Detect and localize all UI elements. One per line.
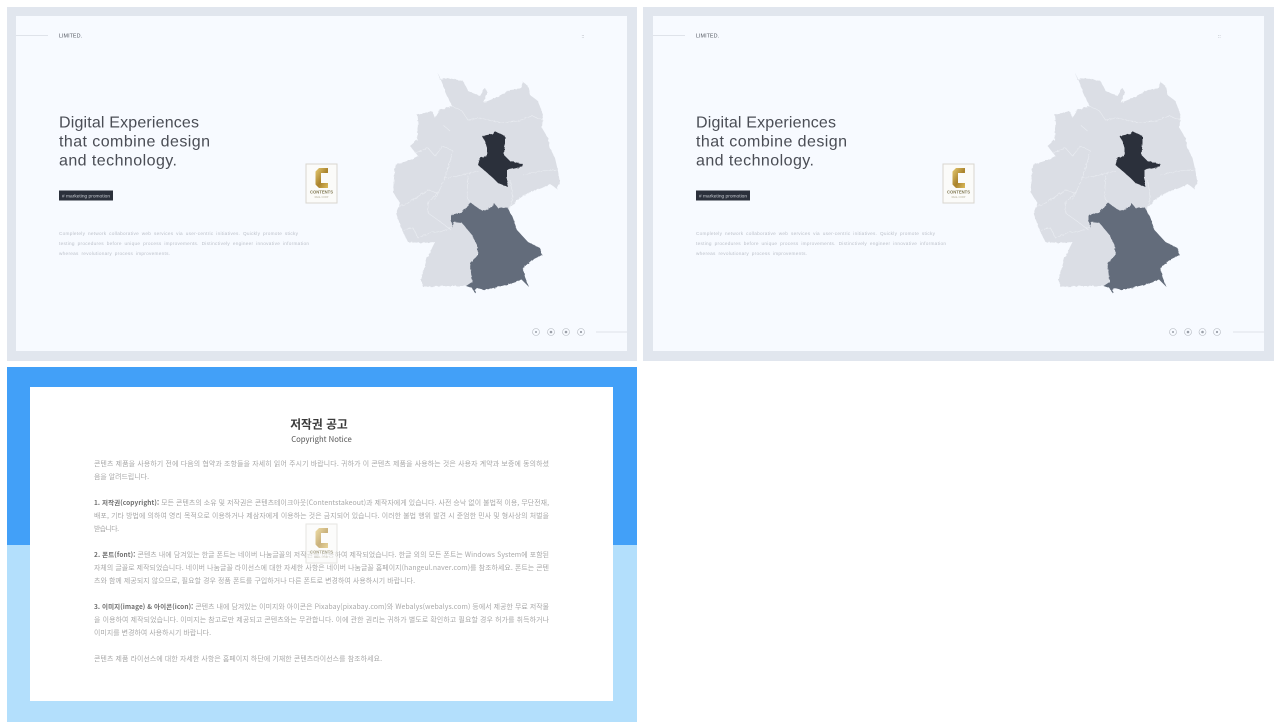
panel: slide 2 [643, 7, 1274, 361]
region: Bavaria [451, 203, 542, 293]
description: testing procedures before unique process improvements. Distinctively engineer innovative information [696, 241, 946, 246]
notice body: 받습니다. [94, 523, 119, 533]
region: Bavaria [1088, 203, 1180, 293]
notice body: 배포, 기타 방법에 의하여 영리 목적으로 이용하거나 제삼자에게 이용하는 것은 금지되어 있습니다. 이러한 불법 행위 발견 시 준엄한 민사 및 형사상의 처벌을 [94, 510, 549, 520]
logo [306, 164, 337, 203]
notice body: 이미지를 변경하여 사용하시기 바랍니다. [94, 627, 211, 637]
notice subtitle: Copyright Notice [291, 434, 352, 445]
heading: and technology. [59, 152, 177, 170]
notice body: 콘텐츠 제품 라이선스에 대한 자세한 사항은 홈페이지 하단에 기재한 콘텐츠라이선스를 참조하세요. [94, 653, 382, 663]
region: Saxony-Anhalt [1116, 131, 1160, 187]
panel: copyright notice [7, 367, 637, 722]
map: Germany [1030, 73, 1198, 293]
notice body: 을 이용하여 제작되었습니다. 이미지는 참고로만 제공되고 콘텐츠와는 무관합니다. 이에 관한 권리는 귀하가 별도로 확인하고 필요할 경우 허가를 취득하거나 [94, 614, 550, 624]
heading: Digital Experiences [696, 114, 836, 132]
tag [696, 190, 750, 200]
region: Germany base [393, 73, 560, 287]
tag: # marketing promotion [699, 194, 747, 200]
heading: that combine design [59, 134, 210, 150]
map: Germany [393, 73, 560, 293]
logo: CONTENTS [947, 190, 970, 194]
description: Completely network collaborative web services via user-centric initiatives. Quickly promote sticky [59, 231, 299, 236]
description: Completely network collaborative web services via user-centric initiatives. Quickly promote sticky [696, 231, 936, 236]
heading: that combine design [696, 134, 847, 150]
description: testing procedures before unique process improvements. Distinctively engineer innovative information [59, 241, 309, 246]
brand label: LIMITED. [696, 34, 719, 40]
notice body: 츠와 함께 제공되지 않으므로, 필요할 경우 정품 폰트를 구입하거나 다른 폰트로 변경하여 사용하시기 바랍니다. [94, 575, 415, 585]
heading [59, 114, 210, 170]
social icons [1170, 328, 1264, 336]
notice body: 1. 저작권(copyright): 모든 콘텐츠의 소유 및 저작권은 콘텐츠테이크아웃(Contentstakeout)과 제작자에게 있습니다. 사전 승낙 없이 불법적 이용, 무단전재, [94, 497, 549, 507]
tag [59, 190, 113, 200]
brand label: LIMITED. [59, 34, 82, 40]
region: Saxony-Anhalt [478, 131, 523, 187]
description: whereas revolutionary process improvements. [696, 251, 807, 256]
logo watermark [306, 524, 337, 563]
notice body: 콘텐츠 제품을 사용하기 전에 다음의 협약과 조항들을 자세히 읽어 주시기 바랍니다. 귀하가 이 콘텐츠 제품을 사용하는 것은 사용자 계약과 보증에 동의하셨 [94, 458, 550, 468]
logo [943, 164, 974, 203]
region: Germany base [1030, 73, 1198, 287]
panel: slide 1 [7, 7, 637, 361]
logo watermark: REAL CORP [315, 556, 329, 559]
heading: and technology. [696, 152, 814, 170]
description [696, 231, 946, 256]
menu dots: :: [1218, 34, 1221, 40]
region borders [398, 106, 558, 238]
social icons [532, 328, 627, 336]
tag: # marketing promotion [62, 194, 110, 200]
heading: Digital Experiences [59, 114, 199, 132]
logo: REAL CORP [315, 196, 329, 199]
logo: REAL CORP [952, 196, 966, 199]
logo: CONTENTS [310, 190, 333, 194]
notice body: 자체의 글꼴로 제작되었습니다. 네이버 나눔글꼴 라이선스에 대한 자세한 사항은 네이버 나눔글꼴 홈페이지(hangeul.naver.com)를 참조하세요. 폰트는 콘텐 [94, 562, 549, 572]
description [59, 231, 309, 256]
heading [696, 114, 847, 170]
region borders [1036, 106, 1196, 238]
menu dots: :: [582, 34, 584, 40]
logo watermark: CONTENTS [310, 550, 333, 554]
notice body: 3. 이미지(image) & 아이콘(icon): 콘텐츠 내에 담겨있는 이미지와 아이콘은 Pixabay(pixabay.com)와 Webalys(webalys.com) 등에서 제공한 무료 저작물 [94, 601, 549, 611]
notice body: 음을 알려드립니다. [94, 471, 149, 481]
description: whereas revolutionary process improvements. [59, 251, 170, 256]
notice body [94, 458, 550, 663]
notice body: 2. 폰트(font): 콘텐츠 내에 담겨있는 한글 폰트는 네이버 나눔글꼴의 저작권을 이용하여 제작되었습니다. 한글 외의 모든 폰트는 Windows System에 포함된 [94, 549, 549, 559]
notice title: 저작권 공고 [290, 416, 348, 432]
